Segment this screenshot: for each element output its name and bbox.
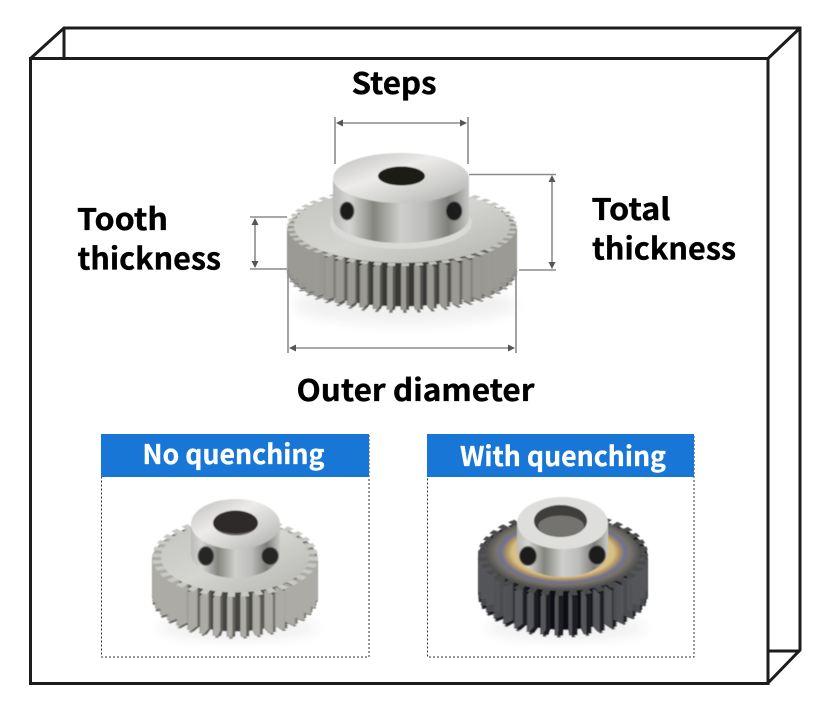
- header text: With quenching: [460, 435, 666, 474]
- dimension: total thickness: [469, 174, 556, 270]
- set screw right: [446, 202, 462, 220]
- panel: with quenching: [427, 434, 694, 657]
- hub collar: [330, 197, 472, 249]
- panel border: [102, 434, 369, 657]
- bore: [213, 510, 258, 536]
- set screw right: [262, 547, 278, 565]
- teeth lit flanks: [485, 520, 641, 632]
- bore wall: [216, 529, 255, 535]
- teeth lit flanks: [159, 525, 311, 633]
- gear tooth tips: [294, 235, 510, 311]
- label: total thickness: Total: [592, 185, 670, 229]
- gear body cylinder: [297, 226, 507, 306]
- set screw left: [520, 546, 536, 566]
- panel: no quenching: [101, 433, 369, 657]
- set screw left: [198, 546, 214, 566]
- dimension: tooth thickness: [250, 217, 287, 269]
- hub top: [333, 153, 469, 203]
- header text: No quenching: [142, 433, 324, 472]
- hub side: [333, 178, 469, 243]
- label: tooth thickness: Tooth: [77, 195, 168, 239]
- hub top: [517, 497, 608, 549]
- body: [489, 554, 637, 630]
- heat-tinted face: [486, 517, 640, 591]
- panel header: [101, 434, 369, 477]
- tooth tips: [159, 563, 311, 635]
- gear teeth lit flanks: [294, 192, 510, 308]
- teeth dark flanks: [485, 520, 641, 632]
- teeth dark flanks: [159, 525, 311, 633]
- set screw right: [588, 546, 606, 564]
- hub side: [191, 524, 280, 578]
- tooth tops: [483, 515, 643, 593]
- label: outer diameter: Outer diameter: [296, 366, 535, 410]
- tooth tips: [485, 558, 641, 634]
- gear photo: untreated: [157, 499, 318, 641]
- label: total thickness: thickness: [592, 224, 736, 268]
- label: tooth thickness: thickness: [78, 234, 221, 278]
- gear teeth dark flanks: [294, 192, 510, 308]
- bore: [534, 505, 587, 537]
- dimension: steps: [335, 117, 468, 164]
- hub top: [191, 499, 280, 549]
- hub side: [517, 523, 608, 577]
- gear face: [294, 189, 510, 263]
- main gear photo: [291, 153, 517, 325]
- bore: [378, 166, 425, 186]
- tooth tops: [157, 520, 313, 594]
- body: [163, 557, 307, 632]
- panel border: [428, 434, 694, 657]
- gear photo: quenched: [483, 497, 646, 641]
- bore wall: [538, 516, 584, 536]
- panel header: [427, 434, 694, 477]
- face: [161, 522, 309, 592]
- set screw left: [340, 202, 354, 220]
- dimension: outer diameter: [288, 270, 516, 353]
- label: steps: Steps: [352, 59, 436, 103]
- gear tooth tops: [291, 187, 513, 265]
